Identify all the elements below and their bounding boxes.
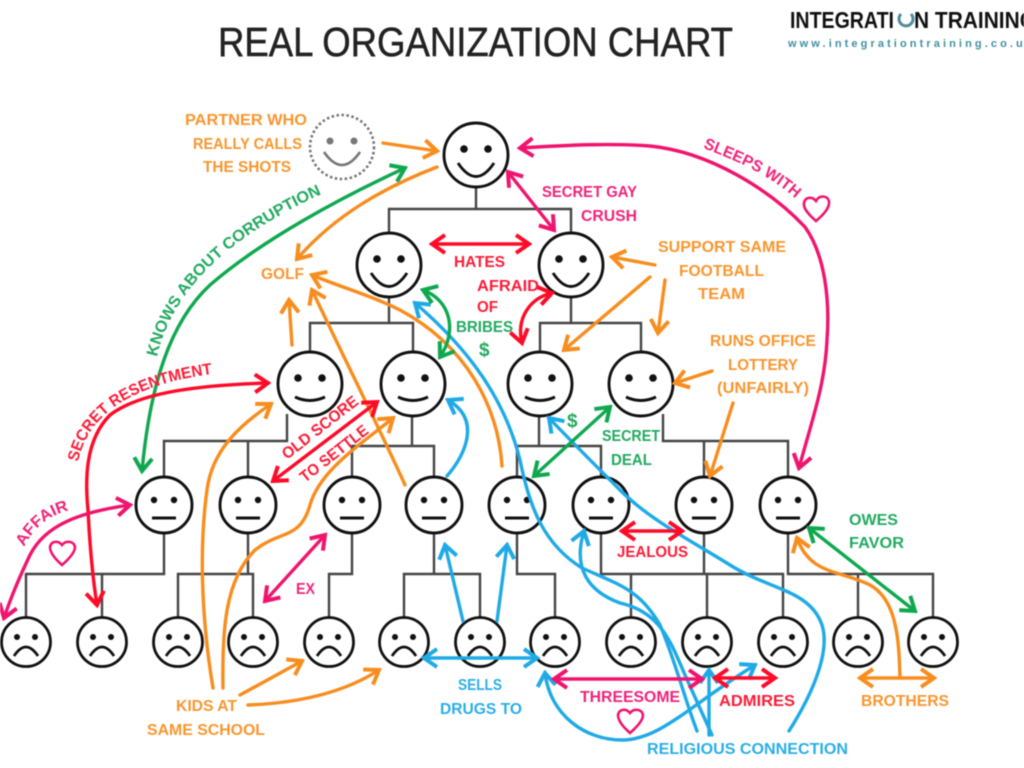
arrow: lottery to face 3d [675,371,712,383]
label: old score to settle [279,393,372,486]
arrow: ex [265,535,325,601]
face 3d [609,352,673,416]
arrow: lottery to face 4g [710,403,733,476]
label: afraid of: AFRAID [477,278,539,295]
label: runs office lottery: (UNFAIRLY) [717,380,809,397]
logo: Integration Training [787,7,1024,50]
arrow: religious connection to level 2 left [415,303,697,731]
arrow: face 4d to golf [312,290,405,485]
face: level 2 left [357,233,421,297]
label: runs office lottery: LOTTERY [728,357,798,374]
org chart connector lines [26,187,933,618]
arrow: hates [432,242,529,246]
label: partner who really calls the shots: REALLY CALLS [193,136,302,153]
face: partner who really calls the shots (dotted) [310,115,374,179]
label: afraid of [477,278,539,316]
label: secret deal: $ [567,411,578,432]
label: support same football team [658,239,786,303]
face 5l [834,618,882,666]
face 5b [78,618,126,666]
label: religious connection: RELIGIOUS CONNECTION [647,741,848,758]
label: kids at same school [147,698,265,739]
arrow: admires [715,676,775,680]
label: support same football team: SUPPORT SAME [658,239,786,256]
label: sells drugs to: DRUGS TO [440,701,522,718]
label: afraid of: OF [477,299,498,316]
label: owes favor [849,512,904,552]
icon: heart near affair [50,542,75,565]
label: old score to settle: TO SETTLE [297,422,372,486]
arrow: face 4e to golf [312,275,502,466]
logo: Integration Training: INTEGRATI [790,7,894,33]
icon: heart near threesome [618,710,643,733]
arrow: threesome [554,677,702,681]
arrow: kids at school to face 3b [223,418,393,688]
label: kids at same school: SAME SCHOOL [147,722,265,739]
arrow: dealer up to face 4d [445,545,463,621]
face 4a [136,477,192,533]
faces: fourth level (neutral) [136,477,816,533]
arrow: owes favor [809,528,915,611]
label: secret gay crush [542,184,637,225]
label: secret resentment: SECRET RESENTMENT [67,362,212,462]
title: REAL ORGANIZATION CHART [218,19,733,65]
arrow: religious connection to face 4f [580,531,712,735]
arrow: religious connection to face 3c [549,418,824,731]
arrow: football to face 3c [564,277,650,350]
face 5k [758,618,808,666]
arrow: jealous [622,529,682,533]
label: sleeps with: SLEEPS WITH [704,138,802,198]
arrow: religious connection to face 5j [707,670,711,735]
face 5m [908,618,958,666]
arrow: kids at school to face 3a [202,404,271,688]
label: secret gay crush: SECRET GAY [542,184,637,201]
label: owes favor: FAVOR [849,535,904,552]
label: runs office lottery [710,333,816,397]
arrow: face 3a to golf [289,300,292,345]
label: old score to settle: OLD SCORE [279,393,362,463]
icon: heart near sleeps with [804,196,829,221]
arrow: secret deal [534,407,610,476]
arrow: sleeps with [520,145,828,468]
arrow: brothers to face 4h [797,538,900,678]
arrow: brothers [860,676,934,680]
arrow: afraid of bribes [423,290,450,357]
label: sells drugs to: SELLS [458,677,502,694]
faces: bottom level (sad) [2,618,958,666]
label: threesome: THREESOME [580,689,680,706]
label: partner who really calls the shots: PARTNER WHO [185,112,307,129]
arrow: sells drugs to [424,656,537,660]
label: knows about corruption: KNOWS ABOUT CORRUPTION [146,184,322,357]
arrow: secret resentment [87,383,268,605]
label: golf: GOLF [261,266,304,283]
face: CEO [444,123,508,187]
label: admires: ADMIRES [719,693,795,710]
label: sells drugs to [440,677,522,718]
face 5g [456,618,504,666]
face 5h [530,618,580,666]
arrow: kids at school to face 5f [248,670,379,705]
face 5i [606,618,656,666]
label: partner who really calls the shots [185,112,307,176]
arrow: afraid of [521,293,552,343]
arrow: football to face 3d [658,280,665,333]
arrow: religious connection curve [545,665,755,740]
face 5c [154,618,202,666]
label: secret deal: DEAL [611,452,652,469]
label: ex: EX [296,581,315,598]
label: secret deal: SECRET [602,428,660,445]
label: kids at same school: KIDS AT [176,698,237,715]
faces: third level (slight smile) [278,352,673,416]
arrow: affair [4,505,130,618]
face 5j [682,618,732,666]
face 4d [406,477,462,533]
face 3c [508,352,572,416]
label: brothers: BROTHERS [861,693,949,710]
label: bribes: $ [479,340,490,361]
label: bribes: BRIBES [456,319,513,336]
faces: top and second level (happy) [357,123,603,297]
label: bribes [456,319,513,361]
label: hates: HATES [454,254,505,271]
face 4c [324,477,380,533]
arrow: boss to golf [297,167,437,259]
face 5a [2,618,50,666]
arrow: knows about corruption [142,168,405,471]
label: partner who really calls the shots: THE SHOTS [203,159,291,176]
arrow: face 4d to face 3b [447,400,468,476]
face 4h [760,477,816,533]
label: secret deal [567,411,660,469]
face 5d [228,618,278,666]
label: support same football team: FOOTBALL [679,263,764,280]
arrow: football to level 2 right [612,257,655,265]
face: level 2 right [539,233,603,297]
face 3a [278,352,342,416]
label: affair: AFFAIR [16,500,69,547]
arrow: kids at school to face 5e [240,661,302,695]
face 4g [676,477,732,533]
face 4b [220,477,276,533]
label: owes favor: OWES [849,512,898,529]
label: runs office lottery: RUNS OFFICE [710,333,816,350]
face 5f [380,618,428,666]
face 4f [573,477,629,533]
label: support same football team: TEAM [698,286,745,303]
face 4e [489,477,545,533]
face 3b [381,352,445,416]
face 5e [304,618,354,666]
arrow: dealer up to face 4e [497,545,507,621]
arrow: partner to boss [383,143,437,151]
label: secret gay crush: CRUSH [581,208,637,225]
arrow: secret gay crush [508,172,554,230]
arrow: old score to settle [273,402,377,481]
label: jealous: JEALOUS [617,544,688,561]
